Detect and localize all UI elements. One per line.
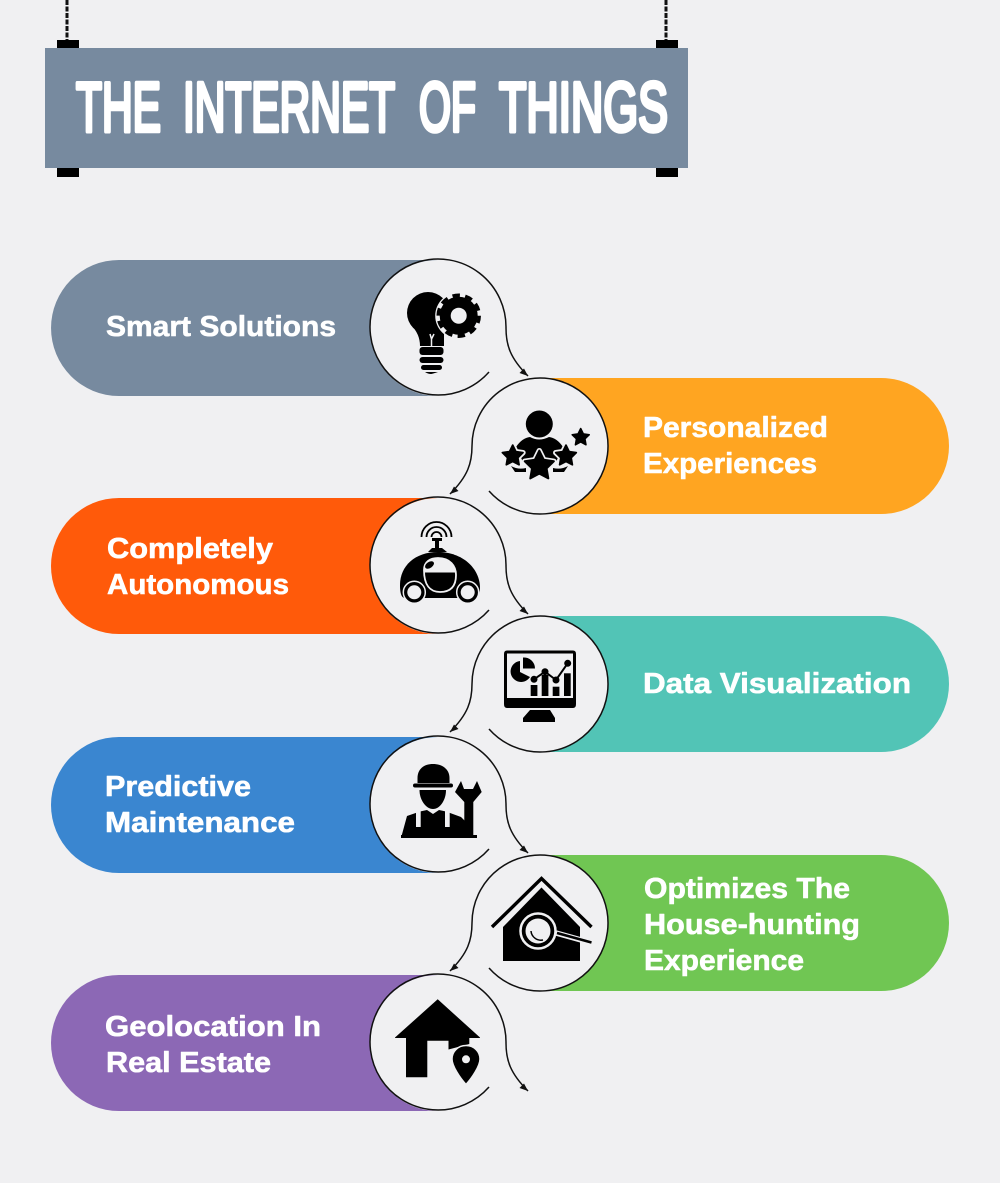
connector arrow bbox=[370, 497, 528, 633]
icon: house with magnifier bbox=[492, 878, 592, 961]
label: Experiences bbox=[643, 448, 817, 480]
label: Data Visualization bbox=[643, 668, 911, 700]
label bbox=[105, 771, 295, 839]
label bbox=[643, 412, 828, 480]
label bbox=[107, 533, 289, 601]
panel: smart solutions bbox=[51, 259, 528, 396]
panel: geolocation in real estate bbox=[51, 974, 528, 1111]
connector arrow bbox=[370, 974, 528, 1110]
title bbox=[76, 68, 668, 146]
connector arrow bbox=[370, 736, 528, 872]
panel: completely autonomous bbox=[51, 497, 528, 634]
label: Smart Solutions bbox=[106, 311, 336, 343]
connector arrow bbox=[450, 616, 608, 752]
title: THE bbox=[76, 68, 161, 146]
label: Experience bbox=[644, 945, 804, 977]
title: OF bbox=[419, 68, 476, 146]
label: Completely bbox=[107, 533, 273, 565]
title: THINGS bbox=[499, 68, 668, 146]
label: Predictive bbox=[105, 771, 251, 803]
label: Optimizes The bbox=[644, 873, 850, 905]
label: House-hunting bbox=[644, 909, 860, 941]
title: INTERNET bbox=[183, 68, 395, 146]
panel: optimizes the house-hunting experience bbox=[450, 855, 949, 991]
icon: worker with wrench bbox=[401, 764, 482, 838]
icon: bulb and gear bbox=[407, 292, 482, 374]
label: Personalized bbox=[643, 412, 828, 444]
panel: personalized experiences bbox=[450, 378, 949, 514]
label bbox=[105, 1011, 321, 1079]
icon: monitor with charts bbox=[504, 650, 576, 722]
icon: house with location pin bbox=[395, 999, 480, 1084]
panel: predictive maintenance bbox=[51, 736, 528, 873]
icon: person with stars bbox=[502, 410, 589, 478]
connector arrow bbox=[450, 855, 608, 991]
icon: self-driving car bbox=[400, 522, 480, 603]
label: Real Estate bbox=[106, 1047, 271, 1079]
label: Geolocation In bbox=[105, 1011, 321, 1043]
connector arrow bbox=[370, 259, 528, 395]
connector arrow bbox=[450, 378, 608, 514]
label bbox=[644, 873, 860, 977]
label: Autonomous bbox=[107, 569, 289, 601]
panel: data visualization bbox=[450, 616, 949, 752]
title sign bbox=[45, 0, 688, 177]
label: Maintenance bbox=[105, 807, 295, 839]
